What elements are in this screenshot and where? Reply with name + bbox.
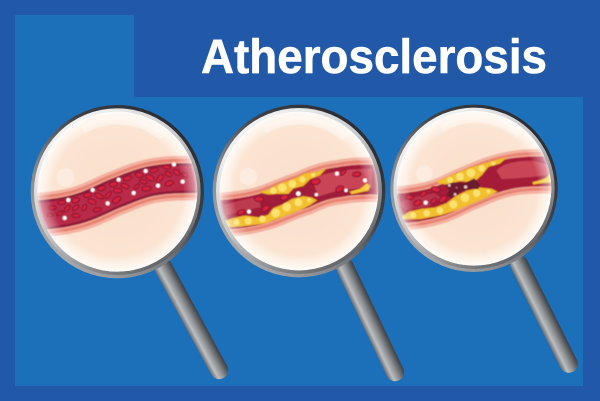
artery healthy [27, 162, 207, 220]
plaque bottom [400, 188, 497, 219]
magnifier 1: healthy artery [27, 105, 231, 382]
lens 2 [208, 105, 388, 277]
red blood cells [406, 186, 448, 207]
plaque bottom [223, 196, 317, 227]
artery with plaque [208, 168, 388, 227]
lens 1 [27, 105, 207, 278]
red blood cells [236, 168, 361, 216]
plaque top [260, 169, 326, 194]
red blood cells [47, 164, 189, 218]
lens 3 [385, 105, 565, 272]
magnifier 2: plaque forming [208, 105, 407, 384]
clot [445, 178, 480, 198]
plaque right [533, 174, 552, 184]
plaque top [437, 157, 507, 184]
glass highlights [397, 111, 551, 266]
platelets [247, 172, 367, 214]
lumen left patch [398, 193, 442, 210]
plaque right [350, 184, 370, 194]
handle 3 [507, 252, 581, 376]
glass highlights [37, 112, 197, 272]
glass highlights [220, 112, 378, 270]
platelets [63, 162, 185, 220]
title: Atherosclerosis [201, 31, 547, 84]
magnifier 3: clotted artery [385, 105, 581, 376]
lumen highlight [497, 161, 550, 179]
artery with clot [385, 157, 565, 219]
platelets and clot cells [424, 184, 467, 205]
header banner [134, 0, 600, 97]
handle 2 [333, 256, 407, 384]
handle 1 [151, 255, 231, 382]
